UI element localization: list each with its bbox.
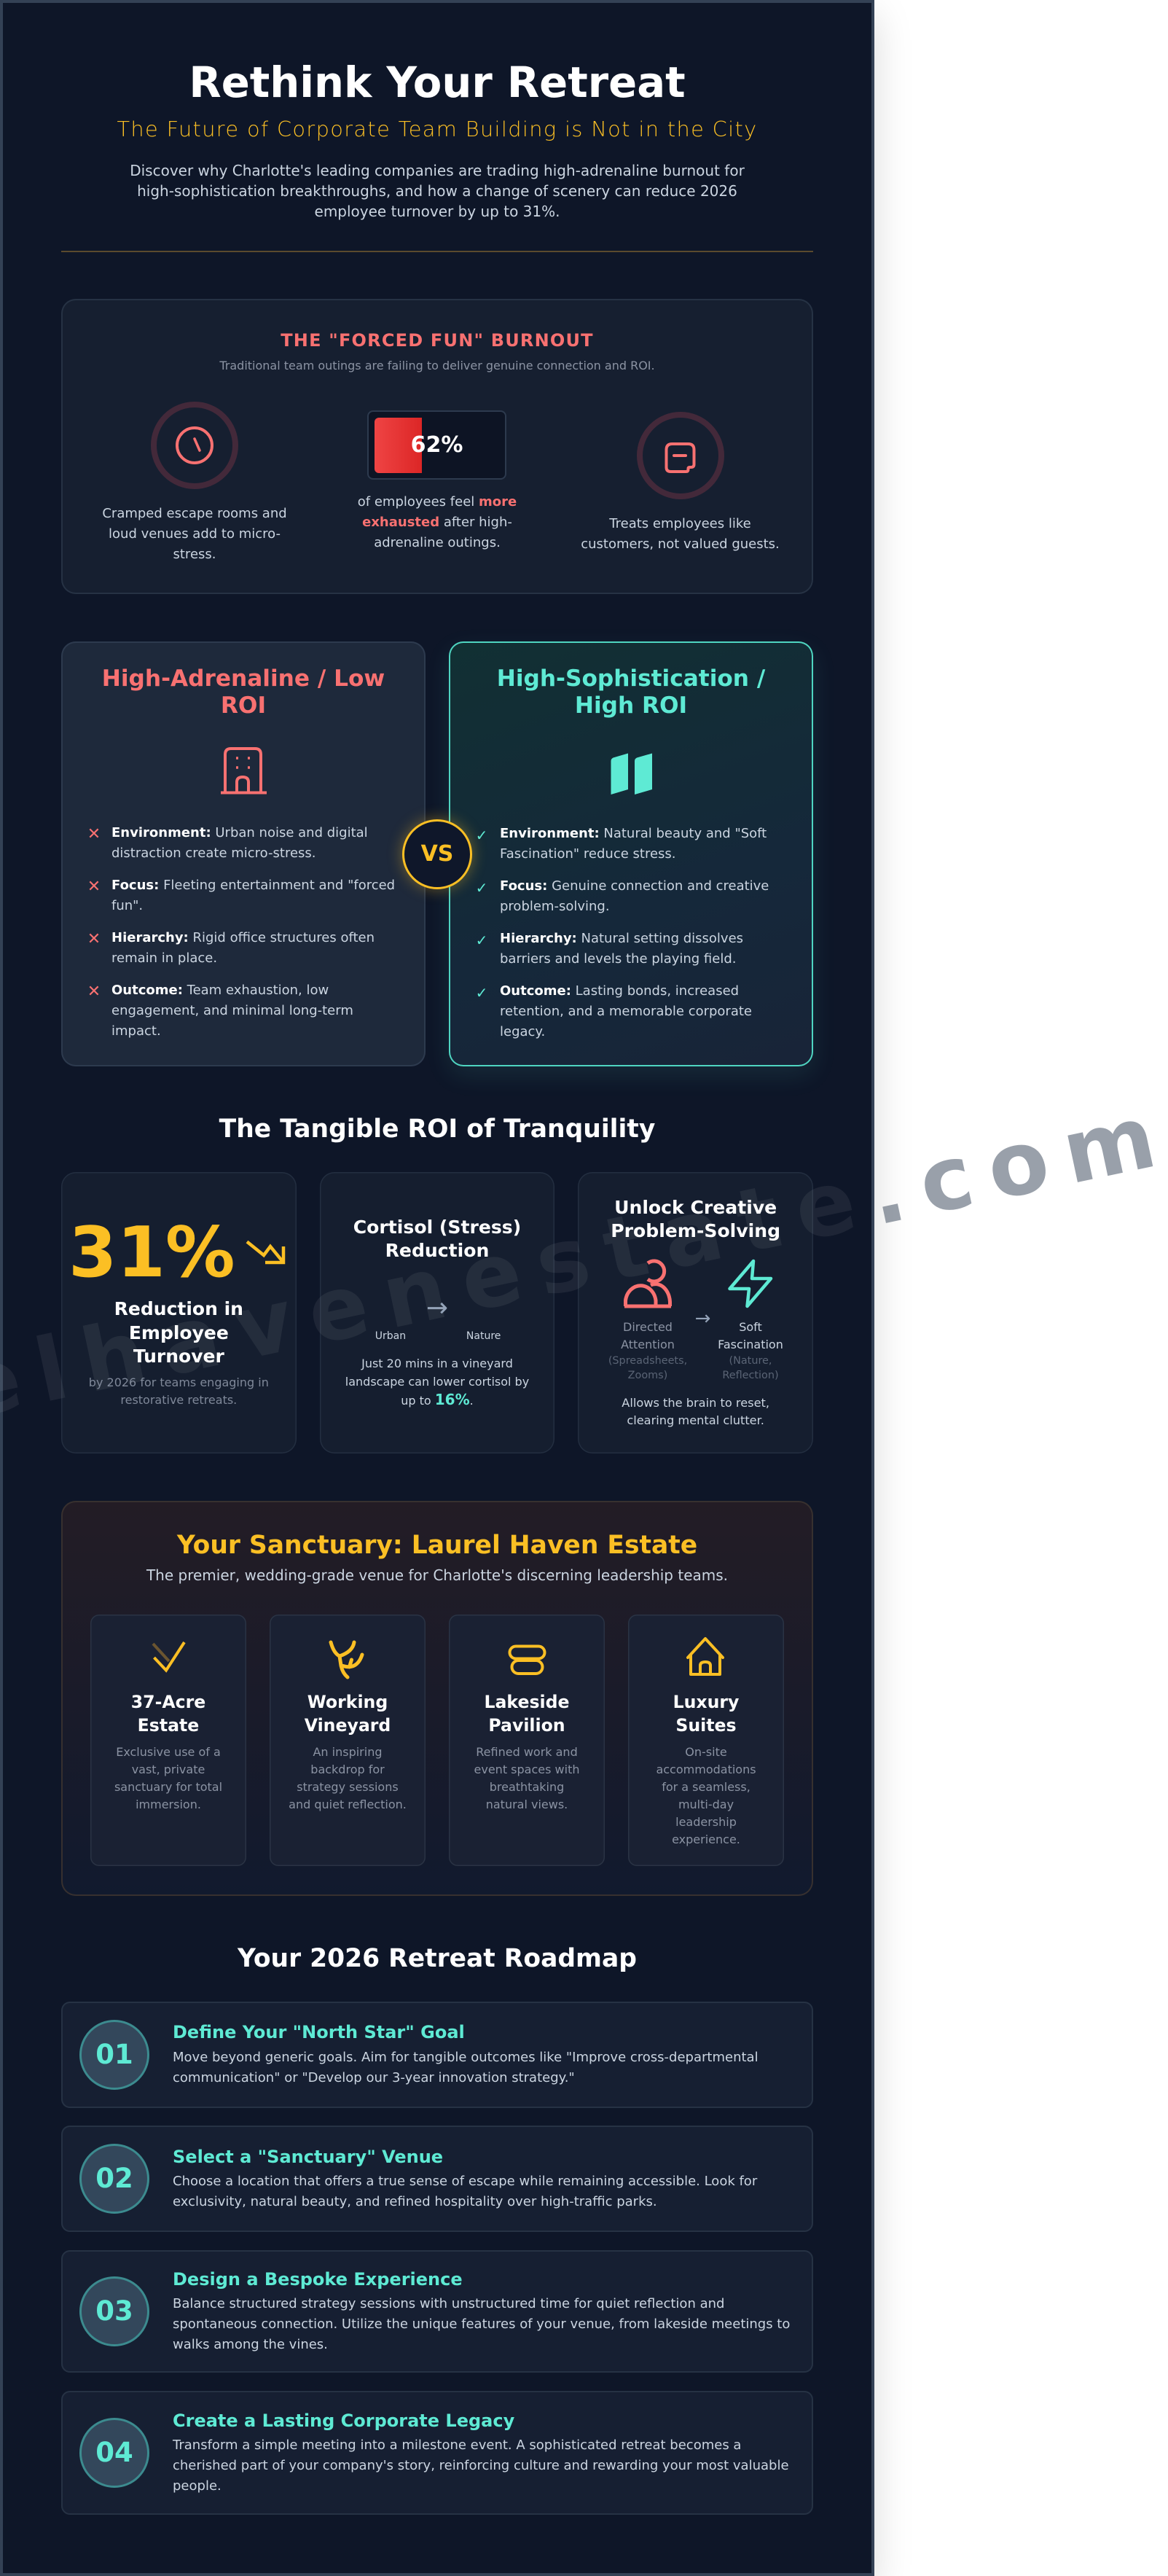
card heading: Reduction [385,1239,489,1261]
text: treated like customers: customers, not valued guests. [581,536,780,552]
feature text: immersion. [136,1798,201,1811]
stat note: by 2026 for teams engaging in [89,1375,269,1389]
item: hierarchy [500,931,743,967]
step number: 03 [95,2295,133,2327]
feature text [628,1744,784,1849]
panel: high sophistication [449,641,813,1066]
intro paragraph: high-sophistication breakthroughs, and how a change of scenery can reduce 2026 [137,182,737,200]
item: outcome: legacy. [500,1024,545,1039]
text: cramped venues: Cramped escape rooms and [102,506,287,521]
feature text: leadership [675,1815,737,1829]
vs badge [402,819,472,889]
label: soft fascination [718,1320,783,1351]
panel: sanctuary [61,1501,813,1896]
note: spreadsheets: (Spreadsheets, [608,1355,687,1367]
step number [79,2276,149,2346]
icon: person [624,1260,672,1308]
stat note: restorative retreats. [120,1392,237,1407]
text: cramped venues: stress. [173,547,216,562]
panel subheading: Traditional team outings are failing to deliver genuine connection and ROI. [219,359,655,372]
marker: ✓ [476,879,487,897]
step number: 04 [95,2437,133,2468]
stat note [89,1375,269,1407]
marker: ✕ [87,983,101,1001]
step text: cherished part of your company's story, reinforcing culture and rewarding your most valuable [173,2458,789,2473]
item: hierarchy: Hierarchy: Rigid office structures often [111,930,375,945]
text: exhausted employees: of employees feel more [358,494,517,510]
step text: Choose a location that offers a true sense of escape while remaining accessible. Look for [173,2174,757,2189]
step number: 01 [95,2039,133,2070]
section heading: roadmap: Your 2026 Retreat Roadmap [238,1944,637,1973]
section heading: ROI: The Tangible ROI of Tranquility [219,1115,655,1144]
marker: ✕ [87,878,101,896]
step text: Move beyond generic goals. Aim for tangible outcomes like "Improve cross-departmental [173,2050,759,2065]
item: focus: Focus: Genuine connection and creative [500,878,769,894]
step number [79,2144,149,2214]
step text: Transform a simple meeting into a milestone event. A sophisticated retreat becomes a [173,2438,741,2453]
label: nature: Nature [466,1330,501,1342]
item: environment: Environment: Urban noise and digital [111,825,368,840]
note: nature [722,1355,779,1381]
stat label: Reduction in [114,1298,243,1319]
arrow: attention shift: → [695,1308,710,1330]
text: exhausted employees: exhausted after high- [362,515,512,530]
feature text: backdrop for [310,1763,385,1776]
intro paragraph: Discover why Charlotte's leading companies are trading high-adrenaline burnout for [130,162,745,179]
subtitle: The Future of Corporate Team Building is Not in the City [117,117,758,141]
heading: high adrenaline: High-Adrenaline / Low [102,666,385,692]
cortisol text: up to 16%. [401,1391,474,1408]
item: environment [500,826,767,862]
feature title: Suites [675,1715,737,1736]
card: working vineyard [270,1615,426,1866]
icon ring: clock [151,402,238,489]
icon: house [677,1633,735,1684]
step text: people. [173,2478,222,2494]
item: environment [111,825,368,861]
step text [173,2171,757,2212]
marker: ✕ [87,930,101,948]
heading: high sophistication [497,666,765,719]
panel: high adrenaline [61,641,426,1066]
title: Rethink Your Retreat [189,58,686,107]
feature text: On-site [685,1745,727,1759]
card heading [353,1216,521,1261]
feature text: sanctuary for total [114,1780,222,1794]
step text [173,2293,790,2355]
icon: office building [221,747,267,795]
marker: ✕ [87,825,101,843]
heading: sanctuary: Your Sanctuary: Laurel Haven Estate [177,1531,697,1560]
feature title: Estate [138,1715,199,1736]
feature title [449,1690,605,1738]
item: outcome [500,983,752,1039]
icon: pavilion [509,1644,546,1675]
cortisol text [345,1357,529,1408]
feature text: accommodations [656,1763,756,1776]
roadmap step 2 [61,2126,813,2232]
arrow: urban to nature: → [426,1293,448,1323]
feature text: vast, private [132,1763,205,1776]
icon: note [665,442,695,473]
step text: walks among the vines. [173,2337,328,2352]
stat label: Employee [129,1322,229,1343]
vs badge: VS [421,841,453,867]
item: outcome: Outcome: Team exhaustion, low [111,983,329,998]
list: high adrenaline drawbacks [87,825,395,1039]
item: hierarchy: Hierarchy: Natural setting dissolves [500,931,743,946]
note: nature: Reflection) [722,1370,779,1381]
intro paragraph: employee turnover by up to 31%. [315,203,560,220]
step text [173,2048,759,2088]
label: directed attention: Directed [623,1320,673,1334]
heading: high adrenaline [102,666,385,719]
step heading: Define Your "North Star" Goal [173,2022,465,2042]
stat bar: 62 percent: 62% [411,432,463,458]
feature title: Vineyard [305,1715,391,1736]
card: cortisol [320,1172,554,1453]
icon: clock [176,426,213,464]
card heading: Unlock Creative [614,1197,777,1218]
item: outcome: impact. [111,1023,161,1039]
feature text: breathtaking [490,1780,564,1794]
feature title: Lakeside [484,1692,570,1712]
card heading [611,1197,780,1241]
heading: high sophistication: High ROI [575,692,687,719]
item: outcome: engagement, and minimal long-term [111,1003,353,1018]
infographic container [0,0,874,2576]
card: lakeside pavilion [449,1615,605,1866]
cortisol text: Just 20 mins in a vineyard [361,1357,513,1370]
icon ring: note [637,412,724,499]
feature title: Working [307,1692,388,1712]
item: hierarchy [111,930,375,966]
cortisol text: landscape can lower cortisol by [345,1375,529,1389]
feature text [289,1745,407,1811]
feature text: natural views. [486,1798,568,1811]
card: luxury suites [628,1615,784,1866]
stat: 31 percent: 31% [68,1211,235,1293]
feature text: multi-day [678,1798,734,1811]
marker: ✓ [476,932,487,949]
heading: forced fun burnout: THE "FORCED FUN" BURNOUT [281,329,594,350]
text: exhausted employees [358,494,517,550]
feature title: Luxury [673,1692,739,1712]
step text: communication" or "Develop our 3-year innovation strategy." [173,2070,575,2085]
text: cramped venues [102,506,287,562]
text: cramped venues: loud venues add to micro- [109,526,281,542]
icon: columns [611,754,652,795]
stat label: Turnover [133,1346,224,1367]
roadmap step 3 [61,2249,813,2373]
item: focus [111,878,395,913]
step heading: Design a Bespoke Experience [173,2268,463,2289]
feature title: Pavilion [488,1715,565,1736]
feature text: Exclusive use of a [116,1745,221,1759]
list: high sophistication benefits [476,826,769,1039]
feature title [131,1692,205,1736]
step text: exclusivity, natural beauty, and refined hospitality over high-traffic parks. [173,2194,657,2209]
label: soft fascination: Soft [739,1320,762,1334]
text: treated like customers [581,516,780,552]
icon: trending down [246,1241,286,1264]
item: focus: problem-solving. [500,899,610,914]
label: directed attention: Attention [621,1338,675,1351]
item: environment: Environment: Natural beauty and "Soft [500,826,767,841]
icon: vine [329,1640,364,1679]
card: creative problem solving [578,1172,813,1453]
roadmap step 4 [61,2391,813,2515]
feature text: strategy sessions [297,1780,399,1794]
item: focus: fun". [111,898,143,913]
roadmap step 1 [61,2002,813,2108]
note: spreadsheets [608,1355,687,1381]
note: spreadsheets: Zooms) [628,1370,667,1381]
stat label [114,1298,243,1367]
feature text: for a seamless, [662,1780,750,1794]
heading: high sophistication: High-Sophistication / [497,666,765,692]
step number [79,2418,149,2488]
icon: check [152,1642,186,1673]
step number: 02 [95,2163,133,2194]
card: turnover [61,1172,297,1453]
watermark [0,1121,1153,1413]
card caption: clearing mental clutter. [627,1413,764,1427]
item: outcome [111,983,353,1039]
intro paragraph [130,162,745,220]
item: hierarchy: remain in place. [111,951,217,966]
note: nature: (Nature, [729,1355,772,1367]
icon: lightning [728,1260,772,1308]
feature text: experience. [672,1833,740,1846]
label: directed attention [621,1320,675,1351]
feature title [628,1690,784,1738]
text: exhausted employees: adrenaline outings. [374,535,501,550]
step number [79,2020,149,2090]
feature text: event spaces with [474,1763,579,1776]
marker: ✓ [476,827,487,844]
card caption [622,1395,769,1427]
feature title [305,1692,391,1736]
step heading: Create a Lasting Corporate Legacy [173,2411,514,2431]
feature text: An inspiring [313,1745,382,1759]
card caption: Allows the brain to reset, [622,1395,769,1410]
item: environment: Fascination" reduce stress. [500,846,676,862]
stat bar: 62 percent [367,410,506,480]
step text [173,2435,789,2497]
step text: spontaneous connection. Utilize the unique features of your venue, from lakeside meetings to [173,2317,790,2332]
sanctuary subheading: The premier, wedding-grade venue for Charlotte's discerning leadership teams. [146,1566,728,1584]
item: focus: Focus: Fleeting entertainment and "forced [111,878,395,893]
feature title: 37-Acre [131,1692,205,1712]
item: focus [500,878,769,914]
step heading: Select a "Sanctuary" Venue [173,2146,443,2166]
feature text: and quiet reflection. [289,1798,407,1811]
item: outcome: Outcome: Lasting bonds, increased [500,983,739,999]
step text: Balance structured strategy sessions with unstructured time for quiet reflection and [173,2296,724,2311]
card heading: Problem-Solving [611,1220,780,1241]
marker: ✓ [476,984,487,1002]
feature text [449,1744,605,1814]
card: 37-acre estate [90,1615,246,1866]
item: outcome: retention, and a memorable corporate [500,1004,752,1019]
feature text: Refined work and [476,1745,578,1759]
feature text [114,1745,222,1811]
panel: forced fun burnout [61,299,813,594]
label: urban: Urban [375,1330,406,1342]
text: treated like customers: Treats employees like [609,516,751,531]
label: soft fascination: Fascination [718,1338,783,1351]
item: hierarchy: barriers and levels the playing field. [500,951,736,967]
item: environment: distraction create micro-stress. [111,846,316,861]
heading: high adrenaline: ROI [221,692,266,719]
card heading: Cortisol (Stress) [353,1216,521,1238]
